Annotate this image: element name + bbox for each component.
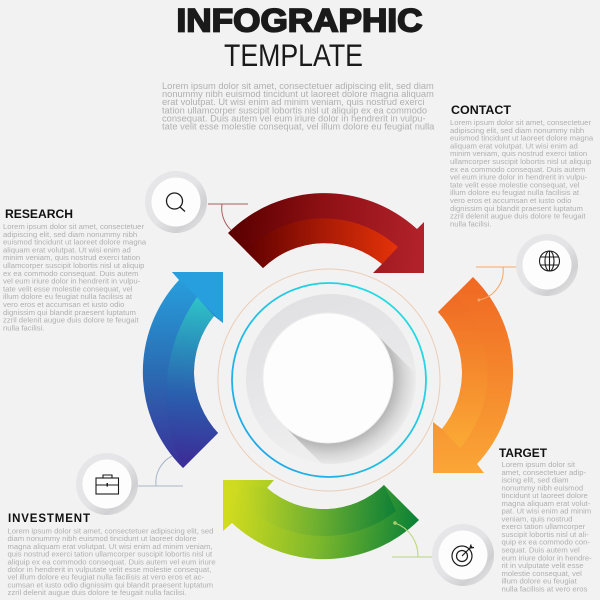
text block: research: vel eum iriure dolor in hendrerit in vulpu- [3, 277, 141, 286]
text block: investment: dolor in hendrerit in vulputate velit esse molestie consequat, [8, 565, 211, 574]
text block: contact: vero eros et accumsan et iusto odio [450, 196, 571, 205]
title: INFOGRAPHIC: INFOGRAPHIC [176, 2, 422, 38]
icon badge: target bullseye [432, 524, 494, 586]
icon badge: contact globe [516, 234, 578, 296]
text block: target: Lorem ipsum dolor sit [502, 460, 576, 469]
arrow: blue [143, 272, 223, 468]
heading: contact: CONTACT [451, 105, 511, 117]
text block: research: euismod tincidunt ut laoreet dolore magna [3, 238, 147, 247]
text block: target: molestie consequat, vel [502, 569, 582, 578]
text block: target: eum iriure dolor in hendre- [502, 553, 592, 562]
text block: target: sequat. Duis autem vel [502, 546, 580, 554]
text block: investment: zzril delenit augue duis dolore te feugait nulla facilisi. [8, 588, 187, 597]
heading: target: TARGET [499, 448, 547, 460]
text block: contact: dignissim qui blandit praesent luptatum [450, 204, 583, 213]
text block: investment: diam nonummy nibh euismod tincidunt ut laoreet dolore [8, 534, 196, 543]
heading: investment: INVESTMENT [8, 513, 90, 525]
text block: target: quip ex ea commodo con- [502, 538, 590, 547]
leader: investment [138, 456, 183, 486]
text block: contact: Lorem ipsum dolor sit amet, consectetuer [450, 118, 591, 127]
briefcase clasp [106, 483, 108, 486]
text block: target: pat. Ut wisi enim ad minim [502, 507, 591, 516]
text block: target: exerci tation ullamcorper [502, 522, 586, 531]
intro text block: nonummy nibh euismod tincidunt ut laoreet dolore magna aliquam [162, 89, 434, 99]
intro text block: consequat. Duis autem vel eum iriure dolor in hendrerit in vulpu- [162, 113, 426, 123]
text block: research: ullamcorper suscipit lobortis nisl ut aliquip [3, 261, 144, 270]
text block: contact: ullamcorper suscipit lobortis nisl ut aliquip [450, 157, 591, 166]
text block: research: Lorem ipsum dolor sit amet, consectetuer [3, 222, 144, 231]
text block: contact: zzril delenit augue duis dolore te feugait [450, 212, 586, 221]
text block: contact: nulla facilisi. [450, 219, 491, 228]
text block: research: zzril delenit augue duis dolore te feugait [3, 316, 139, 325]
leader: research [208, 204, 248, 230]
text block: investment: aliquip ex ea commodo consequat. Duis autem vel eum iriure [8, 557, 216, 566]
text block: contact: ex ea commodo consequat. Duis autem [450, 165, 585, 174]
text block: research: aliquam erat volutpat. Ut wisi enim ad [3, 245, 131, 254]
outer thin ring [218, 269, 440, 491]
text block: target: tincidunt ut laoreet dolore [502, 491, 588, 500]
text block: investment: vel illum dolore eu feugiat nulla facilisis at vero eros et ac- [8, 573, 204, 582]
intro text block [162, 81, 435, 132]
intro text block: Lorem ipsum dolor sit amet, consectetuer adipiscing elit, sed diam [162, 81, 434, 91]
text block: investment: cumsan et iusto odio dignissim qui blandit praesent luptatum [8, 580, 213, 589]
text block: target: rit in vulputate velit esse [502, 561, 584, 570]
text block: contact: tate velit esse molestie consequat, vel [450, 180, 580, 189]
text block: target: iscing elit, sed diam [502, 476, 569, 484]
text block: target: nonummy nibh euismod [502, 483, 583, 492]
text block: contact: adipiscing elit, sed diam nonummy nibh [450, 126, 584, 135]
text block: research: minim veniam, quis nostrud exerci tation [3, 253, 140, 262]
arrow: red [228, 193, 424, 273]
cyan ring [232, 283, 426, 477]
text block: research: ex ea commodo consequat. Duis autem [3, 269, 138, 278]
text block: research: illum dolore eu feugiat nulla facilisis at [3, 292, 133, 301]
intro text block: tation ullamcorper suscipit lobortis nisl ut aliquip ex ea commodo [162, 105, 427, 115]
text block: investment: quis nostrud exerci tation ullamcorper suscipit lobortis nisl ut [8, 550, 213, 559]
intro text block: erat volutpat. Ut wisi enim ad minim veniam, quis nostrud exerci [162, 97, 424, 107]
text block: contact: aliquam erat volutpat. Ut wisi enim ad [450, 141, 578, 150]
text block: target: magna aliquam erat volut- [502, 499, 591, 508]
text block: target [502, 460, 592, 593]
heading: research: RESEARCH [5, 209, 73, 221]
text block: research: dignissim qui blandit praesent luptatum [3, 308, 136, 317]
text block: investment: magna aliquam erat volutpat. Ut wisi enim ad minim veniam, [8, 542, 213, 551]
text block: contact: minim veniam, quis nostrud exerci tation [450, 149, 587, 158]
text block: contact: vel eum iriure dolor in hendrerit in vulpu- [450, 173, 588, 182]
text block: target: illum dolore eu feugiat [502, 577, 578, 586]
text block: target: suscipit lobortis nisl ut ali- [502, 530, 589, 539]
text block: research [3, 222, 147, 332]
text block: research: vero eros et accumsan et iusto odio [3, 300, 124, 309]
text block: research: adipiscing elit, sed diam nonummy nibh [3, 230, 137, 239]
subtitle: TEMPLATE: TEMPLATE [224, 37, 363, 73]
text block: contact [450, 118, 594, 228]
center disc with long shadow [246, 294, 414, 464]
text block: investment: Lorem ipsum dolor sit amet, consectetuer adipiscing elit, sed [8, 526, 213, 536]
text block: investment [8, 526, 216, 597]
text block: target: amet, consectetuer adip- [502, 468, 587, 477]
leader: contact [476, 267, 516, 301]
text block: contact: euismod tincidunt ut laoreet dolore magna [450, 134, 594, 143]
text block: contact: illum dolore eu feugiat nulla facilisis at [450, 188, 580, 197]
text block: research: nulla facilisi. [3, 323, 44, 332]
text block: research: tate velit esse molestie consequat, vel [3, 284, 133, 293]
icon badge: investment briefcase [76, 453, 138, 515]
leader: target [392, 522, 432, 557]
arrow: green [223, 480, 419, 559]
intro text block: tate velit esse molestie consequat, vel illum dolore eu feugiat nulla [162, 122, 435, 132]
text block: target: veniam, quis nostrud [502, 514, 572, 523]
arrow: orange [433, 277, 513, 473]
text block: target: nulla facilisis at vero eros [502, 584, 588, 593]
icon badge: research magnifier [145, 171, 207, 233]
